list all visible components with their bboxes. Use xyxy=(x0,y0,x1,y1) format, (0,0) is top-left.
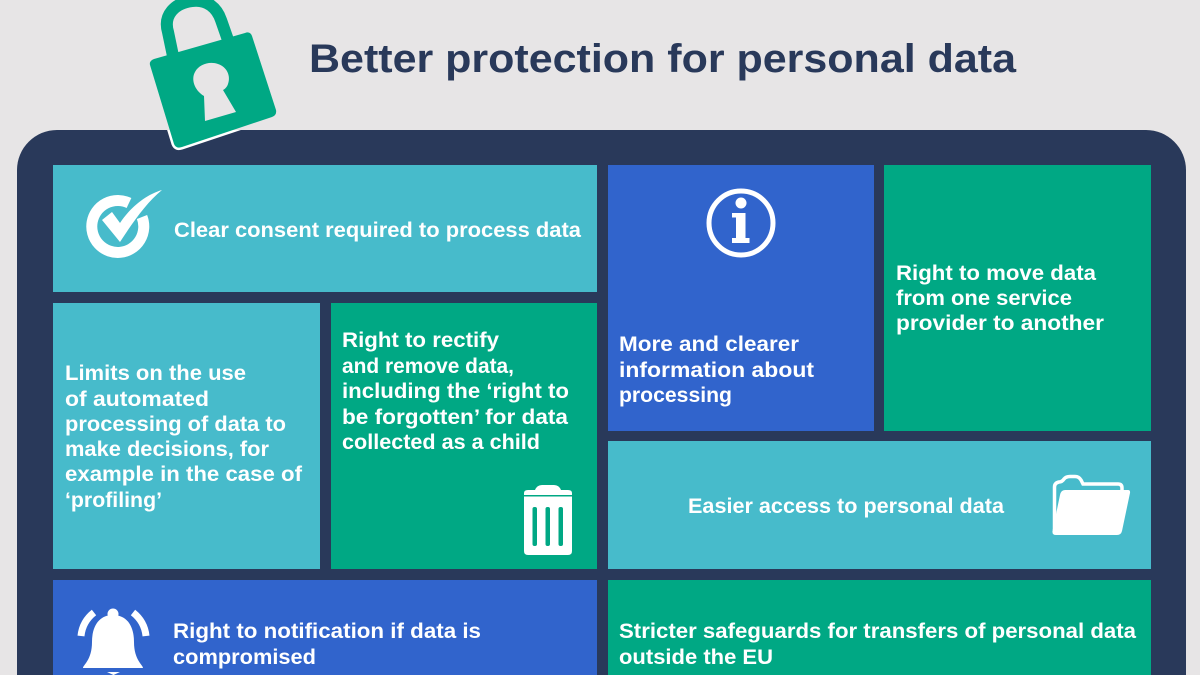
text: limits on automated processing xyxy=(65,362,303,512)
text: limits on automated processing: example in the case of xyxy=(65,463,303,486)
panel: clear consent xyxy=(53,165,597,292)
panel: right to move data xyxy=(884,165,1151,431)
icon: bell xyxy=(81,608,146,675)
text: right to move data: Right to move data xyxy=(896,262,1096,285)
icon: folder xyxy=(1052,476,1130,535)
text: right to rectify and remove: Right to rectify xyxy=(342,329,499,352)
text: clearer information: More and clearer xyxy=(619,333,799,356)
text: right to notification xyxy=(173,620,481,669)
text: right to move data: from one service xyxy=(896,287,1072,310)
text: easier access: Easier access to personal data xyxy=(688,495,1004,518)
text: right to rectify and remove: collected as a child xyxy=(342,431,540,454)
text: limits on automated processing: of automated xyxy=(65,388,209,411)
text: right to rectify and remove: and remove data, xyxy=(342,355,514,378)
text: right to notification: compromised xyxy=(173,646,316,669)
text: right to rectify and remove: be forgotten’ for data xyxy=(342,406,568,429)
icon: padlock xyxy=(150,1,276,148)
text: limits on automated processing: make decisions, for xyxy=(65,438,269,461)
text: right to move data xyxy=(896,262,1104,335)
text: limits on automated processing: ‘profiling’ xyxy=(65,489,162,512)
title: Better protection for personal data xyxy=(309,37,1017,81)
text: clearer information: processing xyxy=(619,384,732,407)
text: stricter safeguards: outside the EU xyxy=(619,646,773,669)
text: stricter safeguards: Stricter safeguards for transfers of personal data xyxy=(619,620,1136,643)
text: clear consent: Clear consent required to process data xyxy=(174,219,581,242)
icon: information xyxy=(709,191,773,255)
text: right to rectify and remove xyxy=(342,329,569,454)
panel: easier access xyxy=(608,441,1151,569)
text: limits on automated processing: Limits on the use xyxy=(65,362,246,385)
text: clearer information: information about xyxy=(619,359,814,382)
text: clearer information xyxy=(619,333,814,407)
text: stricter safeguards xyxy=(619,620,1136,669)
text: right to rectify and remove: including the ‘right to xyxy=(342,380,569,403)
icon: check mark in circle xyxy=(92,190,162,252)
panel: stricter safeguards xyxy=(608,580,1151,675)
text: limits on automated processing: processing of data to xyxy=(65,413,286,436)
icon: trash can xyxy=(524,485,572,555)
panel: clearer information xyxy=(608,165,874,431)
panel: limits on automated processing xyxy=(53,303,320,569)
panel: right to rectify and remove xyxy=(331,303,597,569)
dark tablet frame xyxy=(17,130,1186,675)
panel: right to notification xyxy=(53,580,597,675)
text: right to move data: provider to another xyxy=(896,312,1104,335)
text: right to notification: Right to notification if data is xyxy=(173,620,481,643)
